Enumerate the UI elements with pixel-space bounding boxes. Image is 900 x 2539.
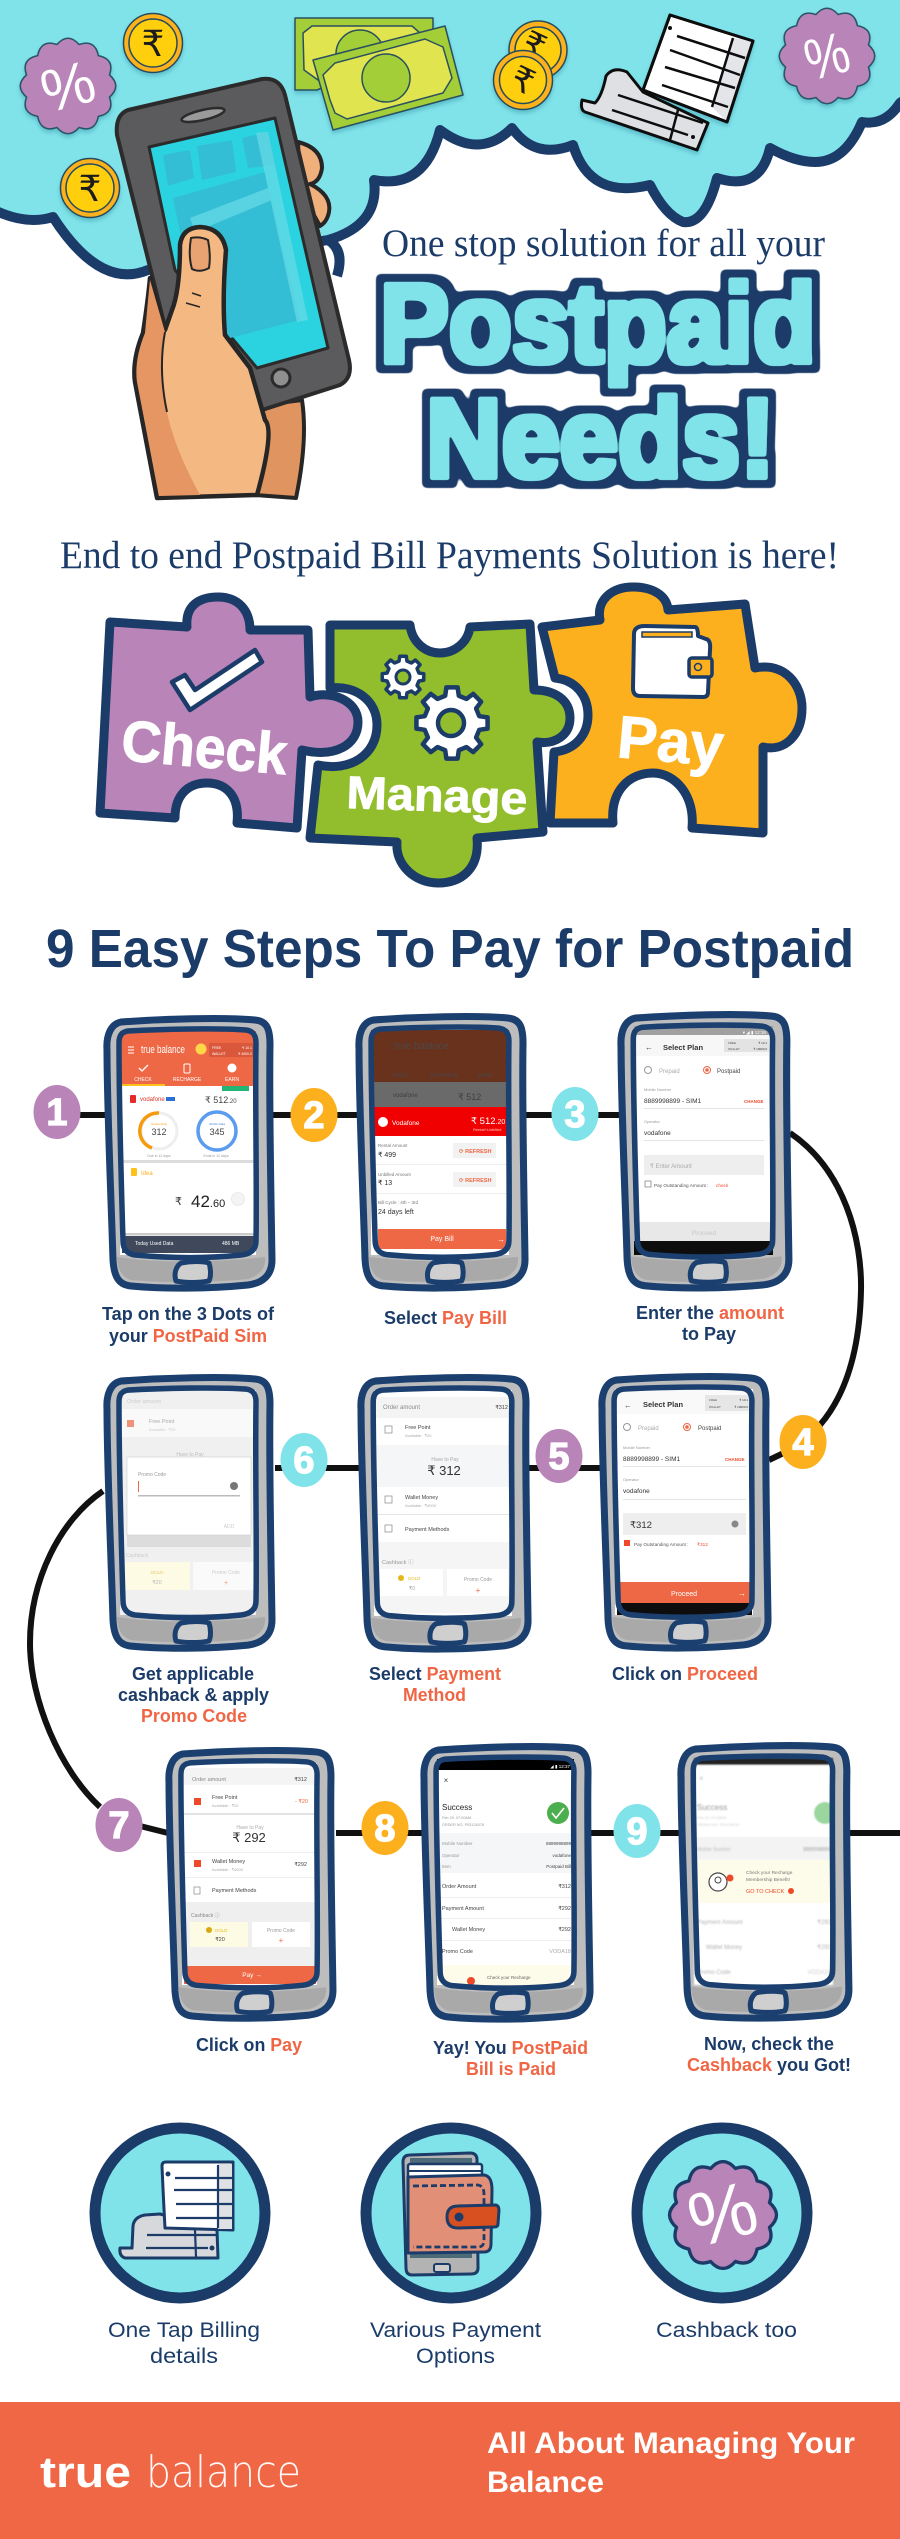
phone: step 8: Mobile Number xyxy=(442,1841,473,1846)
home button xyxy=(272,369,290,387)
phone: step 8: ORDER NO. P53124578 xyxy=(442,1823,484,1827)
footer band xyxy=(0,2402,900,2539)
tagline: All About Managing Your xyxy=(487,2427,855,2460)
phone: step 2: Vodafone xyxy=(392,1120,420,1127)
feature: cashback icon: % xyxy=(679,2165,767,2264)
step badge 4: 4 xyxy=(792,1422,814,1464)
phone: step 2: vodafone xyxy=(393,1093,418,1099)
label: Check: Check xyxy=(119,708,291,787)
phone: step 8 xyxy=(424,1747,590,2019)
phone: step 5: Free Point xyxy=(405,1425,431,1431)
caption: step 8 xyxy=(433,2038,588,2079)
header cloud xyxy=(0,0,900,276)
phone: step 4: CHANGE xyxy=(725,1457,745,1462)
phone: step 8: Operator xyxy=(442,1853,460,1858)
caption: step 9: Now, check the xyxy=(704,2034,834,2054)
feature text: one tap billing: One Tap Billing xyxy=(108,2319,260,2342)
caption: step 8: Bill is Paid xyxy=(466,2059,556,2079)
caption: step 3 xyxy=(636,1303,784,1344)
phone: step 5: + xyxy=(476,1586,481,1595)
phone: step 4: ₹312 xyxy=(697,1542,708,1547)
phone: step 4: WALLET xyxy=(709,1405,721,1409)
thumb wrinkles xyxy=(186,293,201,307)
phone: step 6: Promo Code xyxy=(138,1472,166,1478)
phone: step 4: FREE xyxy=(709,1398,717,1402)
phone: step 9: Success xyxy=(697,1803,727,1812)
phone: step 2: Bill Cycle : 4th – 3rd xyxy=(378,1200,419,1205)
caption: step 5 xyxy=(369,1664,501,1705)
logo: true balance: true xyxy=(40,2448,131,2497)
phone: step 3: Mobile Number xyxy=(644,1087,672,1092)
tagline xyxy=(487,2427,855,2499)
phone: step 9: ORDER NO. P53124578 xyxy=(697,1823,739,1827)
phone: step 1: Ends in 12 days xyxy=(204,1154,229,1158)
icon: percent badge right xyxy=(779,8,875,104)
phone: step 1: RECHARGE xyxy=(173,1077,202,1083)
illustration: hand holding phone xyxy=(117,79,350,498)
phone: step 5: Order amount xyxy=(383,1405,420,1411)
phone: step 1: vodafone xyxy=(140,1097,165,1103)
feature: one tap billing icon xyxy=(95,2128,265,2298)
phone: step 5: GOLD xyxy=(408,1576,421,1581)
phone: step 1: EARN xyxy=(225,1077,239,1083)
phone: step 2: Rental Amount xyxy=(378,1143,408,1148)
step badge 2: 2 xyxy=(303,1095,325,1137)
phone: step 5: Available : ₹4000 xyxy=(405,1503,437,1508)
icon: rupee coin top xyxy=(124,14,182,72)
phone: step 9: × xyxy=(699,1774,704,1783)
step badge 5: 5 xyxy=(548,1436,570,1478)
phone: step 4: Select Plan xyxy=(643,1400,683,1409)
phone: step 1: Outstanding xyxy=(151,1122,167,1126)
phone: step 9: VODA18 xyxy=(807,1970,832,1976)
caption: step 1: your PostPaid Sim xyxy=(109,1326,267,1346)
phone: step 8: Wallet Money xyxy=(452,1927,485,1933)
phone: step 4: vodafone xyxy=(623,1488,650,1495)
phone: step 6: ₹20 xyxy=(152,1579,162,1586)
phone: step 5: ₹0 xyxy=(409,1585,415,1592)
phone: step 7: Payment Methods xyxy=(212,1888,257,1894)
connector path between steps xyxy=(30,1115,900,1833)
phone: step 6 xyxy=(107,1378,272,1648)
caption: step 9 xyxy=(687,2034,851,2075)
puzzle: pay piece xyxy=(542,587,802,833)
phone: step 3: Operator xyxy=(644,1119,660,1124)
icon: rupee coin top: ₹ xyxy=(142,23,164,64)
phone: step 5: Have to Pay xyxy=(431,1457,459,1463)
icon: two stacked rupee coins: ₹ xyxy=(516,24,552,68)
phone: step 6: Cashback xyxy=(126,1553,149,1559)
phone: step 1: ₹ xyxy=(175,1196,182,1208)
thumbnail xyxy=(190,237,210,271)
puzzle: check piece xyxy=(100,597,358,828)
phone: step 2: Unbilled Amount xyxy=(378,1172,412,1177)
title: Postpaid: Postpaid xyxy=(380,261,816,386)
phone: step 2: true balance xyxy=(394,1041,449,1052)
icon: percent badge right: % xyxy=(797,19,857,94)
phone: step 1: 312 xyxy=(151,1127,167,1137)
phone: step 3: Pay Outstanding Amount : xyxy=(654,1183,708,1188)
heading: 9 easy steps: 9 Easy Steps To Pay for Postpaid xyxy=(46,919,854,979)
phone: step 7: Have to Pay xyxy=(236,1825,264,1831)
phone: step 1: Idea xyxy=(141,1171,153,1177)
phone: step 1: 3G/4G Data xyxy=(209,1122,225,1126)
phone: step 2: ₹ 499 xyxy=(378,1151,396,1159)
phone: step 4: Pay Outstanding Amount : xyxy=(634,1542,688,1547)
phone: step 6: + xyxy=(224,1580,228,1587)
phone: step 1: FREE xyxy=(212,1046,222,1050)
step badge 5 xyxy=(536,1429,582,1483)
phone: step 4: ₹ 10000.0 xyxy=(734,1405,748,1409)
icon: rupee coin lower: ₹ xyxy=(79,168,101,209)
icon: small gear xyxy=(382,656,424,698)
icon: two stacked rupee coins: ₹ xyxy=(505,59,540,103)
phone: step 4: Mobile Number xyxy=(623,1445,651,1450)
icon: percent badge left: % xyxy=(34,47,103,126)
icon: percent badge left xyxy=(20,38,116,134)
phone: step 8: Postpaid Bill xyxy=(546,1864,571,1869)
phone: step 3: ▾ ◢ ▮ 12:36 xyxy=(743,1030,766,1035)
phone: step 2: EARN xyxy=(478,1073,492,1079)
phone: step 2: CHECK xyxy=(392,1073,410,1079)
caption: step 9: Cashback you Got! xyxy=(687,2055,851,2075)
phone: step 3: Select Plan xyxy=(663,1043,703,1052)
feature text: cashback too: Cashback too xyxy=(656,2319,797,2342)
phone: step 9 xyxy=(681,1746,849,2018)
label: Pay: Pay xyxy=(615,703,727,779)
phone: step 7: + xyxy=(279,1936,284,1945)
phone: step 7: Cashback ⓘ xyxy=(191,1912,220,1919)
phone: step 1 xyxy=(107,1019,272,1288)
phone: step 5 xyxy=(361,1378,528,1649)
phone: step 4: Proceed xyxy=(671,1591,697,1598)
caption: step 5: Select Payment xyxy=(369,1664,501,1684)
icon: banknotes xyxy=(295,18,463,130)
caption: step 1: Tap on the 3 Dots of xyxy=(102,1304,275,1324)
phone: step 3: vodafone xyxy=(644,1130,671,1137)
phone: step 2: ⟳ REFRESH xyxy=(459,1149,491,1155)
phone: step 3: ← xyxy=(645,1043,653,1052)
phone: step 8: ₹292 xyxy=(558,1905,571,1912)
phone: step 8: Success xyxy=(442,1803,472,1812)
phone: step 7: ₹ 292 xyxy=(232,1830,266,1845)
phone: step 2: Rental+Unbilled xyxy=(473,1127,501,1132)
screen tiles xyxy=(163,132,300,338)
step badge 9 xyxy=(614,1804,660,1858)
phone: step 7: - ₹20 xyxy=(295,1798,308,1805)
phone: step 3: ₹ 10.1 xyxy=(758,1041,767,1045)
puzzle: manage piece xyxy=(310,624,570,883)
phone: step 4: → xyxy=(738,1589,746,1598)
phone: step 8: ₹292 xyxy=(558,1926,571,1933)
icon: wallet xyxy=(633,626,712,697)
phone: step 2: 24 days left xyxy=(378,1209,414,1216)
step badge 2 xyxy=(290,1088,338,1142)
hand and thumb xyxy=(134,227,269,498)
icon: rupee coin lower xyxy=(60,158,120,218)
phone: step 3 xyxy=(621,1015,789,1288)
phone: step 7: Available : ₹4000 xyxy=(212,1867,244,1872)
phone: step 3: WALLET xyxy=(728,1047,740,1051)
phone: step 7: GOLD xyxy=(215,1928,228,1933)
feature text: payment options: Options xyxy=(416,2345,495,2368)
phone: step 3: FREE xyxy=(728,1041,736,1045)
phone: step 2: RECHARGE xyxy=(430,1073,459,1079)
caption: step 4: Click on Proceed xyxy=(612,1664,758,1684)
caption: step 6 xyxy=(118,1664,269,1726)
feature: payment options icon xyxy=(366,2128,536,2298)
heading: one stop solution: One stop solution for all your xyxy=(382,222,825,265)
phone: step 3: CHANGE xyxy=(744,1099,764,1104)
caption: step 6: cashback & apply xyxy=(118,1685,269,1705)
step badge 1: 1 xyxy=(46,1092,68,1134)
phone: step 9: Mobile Number xyxy=(697,1847,731,1853)
phone: step 9: ₹292 xyxy=(817,1919,832,1926)
step badge 7 xyxy=(96,1798,142,1852)
phone: step 8: Feb 29, 07:00AM xyxy=(442,1816,471,1820)
phone: step 4: 8889998899 - SIM1 xyxy=(623,1456,680,1463)
phone: step 7: ₹20 xyxy=(215,1936,225,1943)
phone: step 2: → xyxy=(497,1235,505,1244)
step badge 6: 6 xyxy=(293,1440,315,1482)
phone: step 2: ₹ 13 xyxy=(378,1179,392,1187)
phone: step 7: Promo Code xyxy=(267,1928,295,1934)
phone: step 2: ₹ 512 xyxy=(458,1092,481,1102)
phone: step 8: Check your Recharge xyxy=(487,1975,531,1980)
phone: step 6: Have to Pay xyxy=(176,1452,204,1458)
phone: step 3: check xyxy=(716,1183,729,1188)
phone: step 5: Cashback ⓘ xyxy=(382,1558,414,1566)
phone: step 4: Prepaid xyxy=(638,1426,659,1432)
phone: step 4: ← xyxy=(624,1401,632,1410)
phone: step 3: 8889998899 - SIM1 xyxy=(644,1098,701,1105)
phone: step 8: VODA18 xyxy=(549,1949,571,1955)
phone: step 6: Order amount xyxy=(127,1399,161,1405)
phone: step 9: Membership Benefit! xyxy=(746,1877,790,1883)
phone: step 6: GOLD xyxy=(151,1570,164,1575)
phone: step 8: ₹312 xyxy=(558,1883,571,1890)
phone: step 8: Promo Code xyxy=(442,1949,473,1955)
phone: step 7: Pay → xyxy=(242,1972,262,1979)
phone: step 1: ₹ 512.20 xyxy=(205,1095,237,1105)
phone: step 3: Postpaid xyxy=(717,1069,740,1075)
tagline: Balance xyxy=(487,2466,604,2499)
palm behind phone xyxy=(255,400,304,498)
phone: step 5: Wallet Money xyxy=(405,1495,438,1501)
phone: step 5: ₹312 xyxy=(495,1404,508,1411)
phone: step 2 xyxy=(359,1017,525,1288)
caption: step 3: Enter the amount xyxy=(636,1303,784,1323)
feature text: payment options: Various Payment xyxy=(370,2319,541,2342)
phone: step 8: Payment Amount xyxy=(442,1906,484,1912)
caption: step 7: Click on Pay xyxy=(196,2035,302,2055)
phone: step 7 xyxy=(169,1750,333,2018)
phone: step 8: × xyxy=(444,1776,449,1785)
phone: step 8: vodafone xyxy=(552,1853,571,1858)
phone: step 1: Due in 12 days xyxy=(147,1154,171,1158)
phone: step 6: Free Point xyxy=(149,1419,175,1425)
logo: true balance: balance xyxy=(146,2447,301,2498)
phone: step 1: ₹ 4000.0 xyxy=(238,1052,252,1056)
phone: step 1: ₹ 10.1 xyxy=(242,1046,252,1050)
shaded hand side xyxy=(136,280,200,496)
phone: step 1: 486 MB xyxy=(222,1241,240,1247)
step badge 3 xyxy=(552,1087,598,1141)
phone: step 5: Available : ₹20 xyxy=(405,1433,432,1438)
caption: step 8: Yay! You PostPaid xyxy=(433,2038,588,2058)
phone: step 9: Payment Amount xyxy=(697,1920,743,1926)
phone: step 3: ₹ Enter Amount xyxy=(650,1163,692,1170)
phone: step 4: ₹ 10.1 xyxy=(739,1398,748,1402)
phone: step 8: 8889998899 xyxy=(546,1841,571,1846)
step badge 8 xyxy=(362,1801,408,1855)
phone: step 3: Prepaid xyxy=(659,1069,680,1075)
icon: large gear xyxy=(416,687,488,759)
phone: step 3: Proceed xyxy=(692,1230,716,1237)
feature text: one tap billing xyxy=(108,2319,260,2368)
phone: step 7: Wallet Money xyxy=(212,1859,245,1865)
phone: step 4: Operator xyxy=(623,1477,639,1482)
caption: step 5: Method xyxy=(403,1685,466,1705)
phone: step 3: ₹ 10000.0 xyxy=(753,1047,767,1051)
phone: step 7: ₹312 xyxy=(294,1776,307,1783)
phone: step 8: ◢ ▮ 12:37 xyxy=(550,1764,570,1769)
caption: step 2: Select Pay Bill xyxy=(384,1308,507,1328)
phone: step 8: Item xyxy=(442,1864,451,1869)
phone: step 4: ₹312 xyxy=(630,1520,652,1531)
step badge 9: 9 xyxy=(626,1811,648,1853)
caption: step 6: Promo Code xyxy=(141,1706,247,1726)
phone: step 7: Available : ₹20 xyxy=(212,1803,239,1808)
phone: step 7: ₹292 xyxy=(294,1861,307,1868)
icon: check mark xyxy=(172,650,262,710)
caption: step 1 xyxy=(102,1304,275,1346)
step badge 3: 3 xyxy=(564,1094,586,1136)
phone: step 5: Payment Methods xyxy=(405,1527,450,1533)
icon: two stacked rupee coins xyxy=(494,21,567,110)
subheading: end to end: End to end Postpaid Bill Payments Solution is here! xyxy=(60,534,839,577)
phone: step 9: Check your Recharge xyxy=(746,1870,793,1876)
fingers xyxy=(298,142,329,226)
phone: step 2: ⟳ REFRESH xyxy=(459,1178,491,1184)
phone: step 1: 42.60 xyxy=(191,1192,225,1211)
caption: step 6: Get applicable xyxy=(132,1664,254,1684)
feature text: one tap billing: details xyxy=(150,2345,218,2368)
phone: step 1: CHECK xyxy=(134,1077,152,1083)
phone: step 9: Wallet Money xyxy=(706,1945,742,1951)
phone: step 2: Pay Bill xyxy=(430,1236,454,1243)
logo: true balance xyxy=(40,2447,301,2498)
step badge 7: 7 xyxy=(108,1805,130,1847)
phone: step 1: Today Used Data xyxy=(135,1241,174,1247)
phone: step 7: Free Point xyxy=(212,1795,238,1801)
step badge 6 xyxy=(280,1433,328,1487)
phone: step 1: 345 xyxy=(209,1127,225,1137)
phone: step 9: Feb 29, 07:00AM xyxy=(697,1816,726,1820)
phone: step 5: Promo Code xyxy=(464,1577,492,1583)
phone: step 2: ₹ 512.20 xyxy=(471,1116,505,1127)
speaker xyxy=(180,105,226,125)
phone: step 6: ADD xyxy=(224,1524,235,1530)
title: Needs!: Needs! xyxy=(426,376,775,501)
phone: step 4: Postpaid xyxy=(698,1426,721,1432)
phone: step 9: ₹292 xyxy=(817,1944,832,1951)
step badge 4 xyxy=(780,1415,826,1469)
phone: step 9: 8889998899 xyxy=(803,1847,831,1853)
phone screen xyxy=(149,118,328,368)
icon: paper bill receipt xyxy=(581,15,753,150)
caption: step 3: to Pay xyxy=(682,1324,736,1344)
phone: step 4 xyxy=(602,1377,768,1648)
feature: cashback icon xyxy=(637,2128,807,2298)
phone: step 1: true balance xyxy=(141,1044,185,1056)
phone: step 8: Order Amount xyxy=(442,1884,477,1890)
phone: step 9: GO TO CHECK xyxy=(746,1889,785,1895)
step badge 1 xyxy=(34,1085,80,1139)
step badge 8: 8 xyxy=(374,1808,396,1850)
label: Manage: Manage xyxy=(346,766,528,824)
phone: step 5: ₹ 312 xyxy=(427,1463,461,1478)
phone: step 1: WALLET xyxy=(212,1052,227,1056)
phone: step 6: Available : ₹20 xyxy=(149,1427,176,1432)
phone: step 9: Promo Code xyxy=(697,1970,731,1976)
phone: step 7: Order amount xyxy=(192,1777,226,1783)
feature text: payment options xyxy=(370,2319,541,2368)
phone body xyxy=(117,79,350,410)
phone: step 6: Promo Code xyxy=(212,1570,240,1576)
